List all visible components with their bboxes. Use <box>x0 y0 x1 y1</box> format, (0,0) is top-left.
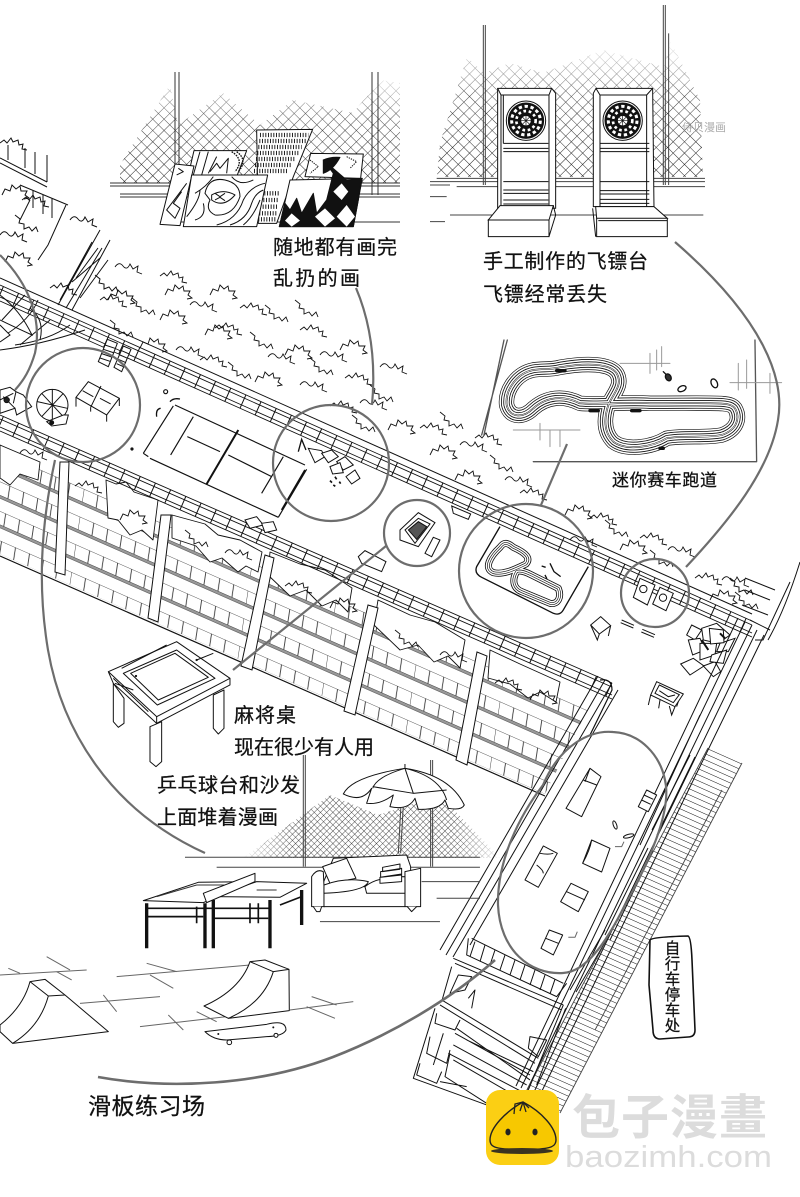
icon: umbrella from above <box>37 389 68 426</box>
building facade with window rows <box>0 445 590 796</box>
stair block and lower structure <box>413 958 566 1105</box>
icon: ramp 3 <box>583 840 610 872</box>
callout circles and leader lines <box>0 242 779 1084</box>
caption: ping-pong table and sofa: 上面堆着漫画 <box>157 806 278 829</box>
building facade columns <box>55 462 487 765</box>
caption: mahjong table: 现在很少有人用 <box>234 736 374 759</box>
lower rooftop fence and ivy over it <box>0 415 612 735</box>
painting: wavy lines with lips <box>183 175 268 227</box>
icon: table-tennis table <box>143 873 307 948</box>
icon: steamed-bun logo <box>486 1090 559 1165</box>
track stands and model cars <box>557 371 719 448</box>
icon: papers on lower railing <box>245 517 277 533</box>
icon: sign near mahjong circle <box>358 551 386 572</box>
ground lines and posts <box>185 755 480 922</box>
painting: black and white diamonds back <box>305 153 363 178</box>
chain-link fence behind dart machines <box>437 40 703 177</box>
callout: bike parking label <box>649 936 695 1039</box>
icon: right ramp <box>204 960 289 1018</box>
caption: skateboard practice: 滑板练习场 <box>88 1093 205 1119</box>
watermark: site name <box>565 1092 772 1174</box>
panel: dart machines <box>430 5 705 237</box>
icon: sun loungers <box>98 339 131 372</box>
icon: bench <box>638 790 657 812</box>
watermark: site name: baozimh.com <box>565 1139 772 1174</box>
icon: ramp 1 <box>566 768 601 817</box>
ivy patches covering top window rows <box>0 445 560 702</box>
right wing: ramps and boxes <box>413 768 657 1105</box>
panel: stacked paintings <box>160 129 363 227</box>
circle A contents: umbrella, table, loungers <box>0 339 386 572</box>
fence posts and ground lines at paintings <box>110 72 400 222</box>
dart machines miniature and floor objects <box>591 578 735 715</box>
icon: small stool <box>591 617 611 640</box>
icon: beach umbrella <box>343 764 464 809</box>
right wing of rooftop: railings <box>440 618 764 1095</box>
chain-link fence behind paintings <box>120 80 400 183</box>
painting: zig-zag stripes <box>188 151 247 175</box>
foliage behind the rooftop fence <box>100 264 758 609</box>
callout: bike parking label: 自行车停车处 <box>662 940 680 1033</box>
icon: ping-pong table from above <box>76 382 119 422</box>
caption: paintings: 随地都有画完 <box>273 236 397 259</box>
icon: skate rails <box>568 820 634 937</box>
caption: paintings: 乱扔的画 <box>273 267 360 290</box>
painting: tall stippled canvas <box>254 129 313 223</box>
roof edge ticks <box>467 938 567 997</box>
top-right building corner <box>730 562 800 640</box>
painting: left narrow <box>160 164 194 226</box>
panel: sofa lounge with umbrella <box>143 755 480 948</box>
watermark: small grey credit: 侍贝漫画 <box>682 120 726 134</box>
icon: dart machine right <box>593 88 667 237</box>
small racetrack in circle <box>476 527 588 614</box>
caption: ping-pong table and sofa: 乒乓球台和沙发 <box>157 774 300 797</box>
fence posts and ground <box>430 5 705 222</box>
icon: left ramp <box>0 979 108 1043</box>
icon: box 5 <box>541 930 563 955</box>
watermark: site name: 包子漫畫 <box>572 1092 767 1145</box>
mahjong table miniature in circle <box>400 506 471 557</box>
caption: mini racetrack: 迷你赛车跑道 <box>612 470 717 490</box>
ground lines <box>0 957 353 1030</box>
icon: dart machine left <box>488 88 556 237</box>
panel: mini racetrack detail <box>482 340 782 462</box>
icon: skateboard <box>205 1023 286 1045</box>
icon: pile of canvases <box>681 623 735 677</box>
frame and ground lines <box>482 340 782 462</box>
icon: sofa <box>312 855 421 912</box>
icon: ramp 2 <box>525 846 557 887</box>
floor marks <box>621 620 655 637</box>
icon: low table with sketch <box>648 682 683 715</box>
icon: mini dart cabinets <box>633 578 673 611</box>
icon: discarded pile at circle A edge <box>0 387 32 415</box>
icon: scattered canvases at circle B <box>298 439 360 486</box>
painting: black splash with diamonds <box>279 160 362 227</box>
track: figure-eight course <box>506 365 737 447</box>
caption: dart machines: 飞镖经常丢失 <box>483 283 607 306</box>
floor markings: court outline <box>131 390 307 517</box>
bike parking: hatched stair band <box>527 748 742 1113</box>
mahjong table large <box>108 642 230 767</box>
icon: box 4 <box>561 883 588 912</box>
panel: skateboard park <box>0 957 353 1045</box>
chain-link fence behind sofa <box>243 795 500 858</box>
upper rooftop fence running diagonally <box>0 278 752 637</box>
caption: mahjong table: 麻将桌 <box>234 704 296 727</box>
caption: dart machines: 手工制作的飞镖台 <box>483 250 648 273</box>
top-left corner: distant wall, tree canopy and ladder <box>0 138 135 350</box>
